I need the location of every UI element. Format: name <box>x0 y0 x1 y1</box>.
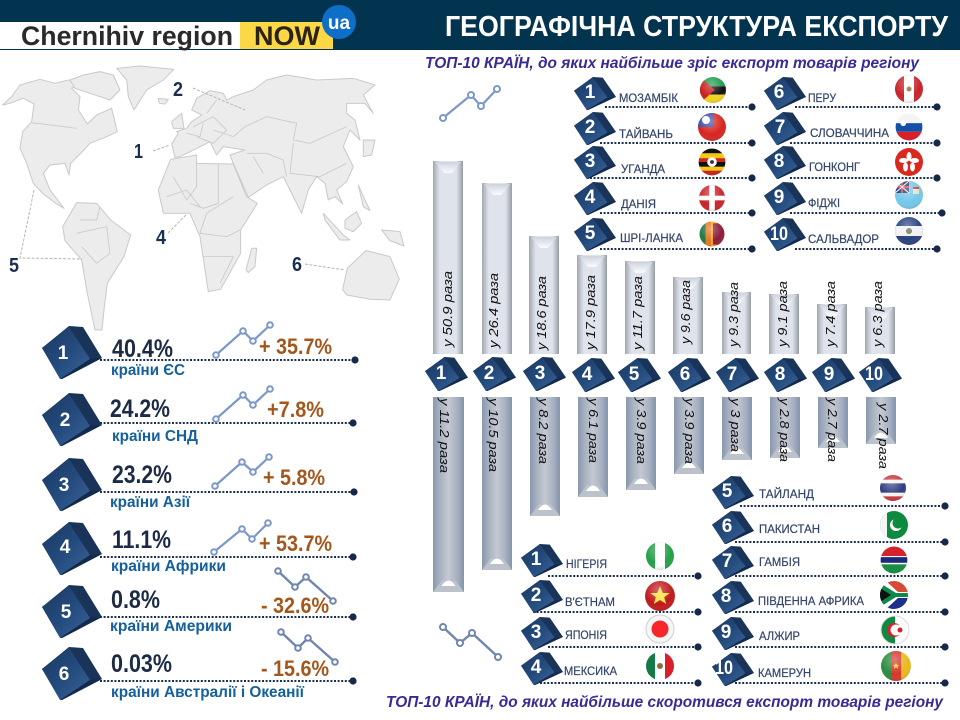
bar 10 top <box>865 281 895 354</box>
bar 10 bottom <box>866 397 896 469</box>
region row 2 <box>42 386 357 446</box>
row Mozambique: МОЗАМБІК <box>619 93 678 105</box>
row El Salvador: САЛЬВАДОР <box>808 234 879 246</box>
region row 6: - 15.6% <box>261 656 329 681</box>
row Nigeria <box>521 542 702 580</box>
icon: growth trend <box>440 86 500 121</box>
subtitle: top decline: ТОП-10 КРАЇН, до яких найбільше скоротився експорт товарів регіону <box>386 693 944 711</box>
row South Africa: 8 <box>721 586 731 607</box>
bar 10 top: у 6.3 раза <box>870 281 885 348</box>
bar number cubes: 7 <box>727 364 737 385</box>
region row 5: 0.8% <box>111 586 160 614</box>
region row 1 <box>42 322 359 379</box>
row El Salvador <box>764 217 941 253</box>
region row 4: 11.1% <box>112 526 171 554</box>
bar 4 bottom <box>578 397 608 497</box>
row Algeria: 9 <box>721 622 731 643</box>
row Hong Kong: ГОНКОНГ <box>809 162 861 174</box>
bar 10 bottom: у 2.7 раза <box>876 402 891 469</box>
row Algeria: АЛЖИР <box>759 631 800 643</box>
bar number cubes: 3 <box>535 363 545 384</box>
row Mozambique: 1 <box>585 82 596 103</box>
bar 7 top <box>722 282 751 354</box>
bar number cubes: 8 <box>775 364 785 385</box>
row Taiwan: ТАЙВАНЬ <box>619 128 673 141</box>
region row 6 <box>42 629 357 701</box>
bar number cubes: 10 <box>865 364 883 385</box>
bar 5 top <box>625 261 655 354</box>
row Cameroon <box>712 651 949 687</box>
region row 4: + 53.7% <box>259 531 332 556</box>
row Peru: ПЕРУ <box>808 93 837 105</box>
icon: flag Pakistan <box>880 511 908 539</box>
bar number cubes: 5 <box>629 364 640 385</box>
row Peru: 6 <box>774 82 784 103</box>
bar 2 bottom <box>482 397 512 570</box>
icon: flag Thailand <box>880 475 906 501</box>
bar 7 top: у 9.3 раза <box>726 282 741 348</box>
row South Africa <box>712 581 949 616</box>
logo badge: ua <box>322 5 356 39</box>
region row 3: 23.2% <box>112 461 172 489</box>
bar 8 top <box>769 281 799 354</box>
icon: flag Vietnam <box>645 581 675 611</box>
icon: flag El Salvador <box>895 217 923 245</box>
row Uganda: 3 <box>585 151 595 172</box>
row Sri Lanka: ШРІ-ЛАНКА <box>620 233 683 245</box>
region row 1: + 35.7% <box>259 334 332 359</box>
row Vietnam <box>521 580 702 616</box>
icon: flag Algeria <box>881 616 909 644</box>
bar number cubes: 6 <box>680 364 690 385</box>
bar number cubes: 4 <box>582 364 593 385</box>
bar 6 bottom <box>674 397 704 474</box>
bar 8 top: у 9.1 раза <box>775 281 790 348</box>
icon: flag Hong Kong <box>895 148 923 176</box>
row Gambia: ГАМБІЯ <box>759 557 800 569</box>
bar 8 bottom: у 2.8 раза <box>777 397 792 462</box>
logo badge: ua: ua <box>328 13 351 34</box>
map label 5: 5 <box>9 255 19 277</box>
bar 6 top <box>673 277 703 354</box>
icon: flag Peru <box>895 75 923 103</box>
icon: flag Denmark <box>699 185 725 211</box>
region row 5: 5 <box>61 602 72 623</box>
row Pakistan: 6 <box>722 516 732 537</box>
bar 2 top: у 26.4 раза <box>486 273 501 349</box>
region row 3: 3 <box>59 475 69 496</box>
row Hong Kong: 8 <box>774 151 784 172</box>
bar 3 top: у 18.6 раза <box>534 276 549 351</box>
row Pakistan <box>712 511 949 546</box>
row Denmark: 4 <box>585 187 596 208</box>
row Peru <box>764 75 941 111</box>
bar 6 bottom: у 3.9 раза <box>682 397 697 464</box>
row Uganda <box>574 146 756 182</box>
bar 1 bottom: у 11.2 раза <box>437 397 452 473</box>
bar 1 top: у 50.9 раза <box>440 271 455 348</box>
icon: flag Slovenia <box>896 114 922 140</box>
bar 1 bottom <box>433 397 464 592</box>
row Vietnam: В'ЄТНАМ <box>565 597 615 609</box>
bar 5 bottom: у 3.9 раза <box>634 397 649 464</box>
icon: flag Fiji <box>895 181 923 209</box>
icon: flag Taiwan <box>698 113 726 141</box>
row Pakistan: ПАКИСТАН <box>759 524 820 536</box>
icon: flag Nigeria <box>646 542 674 570</box>
row Algeria <box>712 616 949 651</box>
row El Salvador: 10 <box>770 224 788 245</box>
region row 6: 6 <box>59 664 69 685</box>
chart: decline bars <box>433 397 896 592</box>
bar 7 bottom <box>722 397 752 460</box>
row Vietnam: 2 <box>531 585 541 606</box>
bar 7 bottom: у 3 раза <box>728 397 743 452</box>
icon: flag South Africa <box>880 581 908 609</box>
row Japan: 3 <box>531 622 541 643</box>
header bar <box>0 0 960 51</box>
bar 9 bottom <box>818 397 848 462</box>
bar number cubes: 2 <box>484 363 494 384</box>
bar 4 top: у 17.9 раза <box>583 275 598 351</box>
logo text: NOW: NOW <box>254 21 321 51</box>
row Hong Kong <box>764 146 941 182</box>
region row 1: 1 <box>58 343 69 364</box>
bar 3 bottom: у 8.2 раза <box>536 397 551 464</box>
world map <box>3 66 404 330</box>
chart: growth bars <box>433 161 895 354</box>
icon: flag Cameroon <box>881 651 911 681</box>
bar 2 top <box>482 183 512 354</box>
region row 6: країни Австралії і Океанії <box>111 684 304 701</box>
region row 2: 2 <box>60 410 70 431</box>
row Cameroon: КАМЕРУН <box>758 668 811 680</box>
bar 6 top: у 9.6 раза <box>678 280 693 345</box>
panel: growth countries <box>574 75 946 253</box>
row Slovakia: СЛОВАЧЧИНА <box>810 128 889 140</box>
row Thailand: ТАЙЛАНД <box>759 488 814 501</box>
region row 4: 4 <box>60 537 71 558</box>
icon: flag Japan <box>646 615 674 643</box>
bar 5 bottom <box>626 397 656 490</box>
row Nigeria: 1 <box>531 549 542 570</box>
region row 5 <box>42 568 357 638</box>
row Mexico: 4 <box>531 657 542 678</box>
region row 2: країни СНД <box>112 428 199 445</box>
subtitle: top growth: ТОП-10 КРАЇН, до яких найбільше зріс експорт товарів регіону <box>425 54 920 72</box>
row Denmark <box>574 182 756 217</box>
row Nigeria: НІГЕРІЯ <box>566 559 607 571</box>
region row 2: +7.8% <box>267 397 324 422</box>
bar 1 top <box>433 161 463 354</box>
row Thailand: 5 <box>722 481 733 502</box>
icon: flag Mexico <box>646 652 674 680</box>
leader lines <box>20 88 345 270</box>
region row 4: країни Африки <box>111 558 226 575</box>
row Taiwan <box>574 112 756 147</box>
map label 4: 4 <box>156 227 167 249</box>
row Sri Lanka: 5 <box>585 223 596 244</box>
row Denmark: ДАНІЯ <box>621 199 656 211</box>
row Cameroon: 10 <box>715 658 733 679</box>
row Sri Lanka <box>574 218 756 253</box>
row Gambia: 7 <box>722 551 732 572</box>
bar 3 bottom <box>530 397 560 516</box>
row Slovakia: 7 <box>775 117 785 138</box>
region row 5: країни Америки <box>110 618 232 635</box>
panel: decline countries <box>521 475 949 687</box>
row Thailand <box>712 475 949 510</box>
row Japan: ЯПОНІЯ <box>565 630 607 642</box>
region row 4 <box>42 520 357 575</box>
icon: flag Gambia <box>881 547 907 574</box>
region row 2: 24.2% <box>110 395 170 423</box>
bar 9 bottom: у 2.7 раза <box>825 397 840 462</box>
bar number cubes: 9 <box>824 364 834 385</box>
region row 6: 0.03% <box>111 650 172 678</box>
map label 6: 6 <box>292 254 302 276</box>
row Mozambique <box>574 77 756 111</box>
region row 3 <box>42 454 358 511</box>
logo text: Chernihiv region: Chernihiv region <box>21 21 233 51</box>
row Slovakia <box>764 112 941 147</box>
row Fiji: ФІДЖІ <box>808 198 840 210</box>
bar number cubes: 1 <box>436 363 447 384</box>
icon: flag Sri Lanka <box>700 222 724 246</box>
region row 1: країни ЄС <box>111 362 185 379</box>
icon: flag Uganda <box>699 149 725 175</box>
row South Africa: ПІВДЕННА АФРИКА <box>758 596 864 608</box>
bar 4 top <box>577 255 607 354</box>
row Gambia <box>712 546 949 580</box>
region row 3: країни Азії <box>110 494 190 511</box>
bar 4 bottom: у 6.1 раза <box>586 397 601 463</box>
icon: decline trend <box>440 624 501 660</box>
bar 2 bottom: у 10.5 раза <box>486 397 501 472</box>
row Japan <box>521 615 702 651</box>
bar 5 top: у 11.7 раза <box>630 276 645 351</box>
row Mexico: МЕКСИКА <box>564 666 617 678</box>
row Mexico <box>521 652 702 687</box>
region row 5: - 32.6% <box>261 593 329 618</box>
bar number cubes <box>425 357 902 392</box>
bar 8 bottom <box>770 397 800 462</box>
row Taiwan: 2 <box>585 117 595 138</box>
bar 3 top <box>529 236 559 354</box>
bar 9 top <box>817 281 847 354</box>
bar 9 top: у 7.4 раза <box>823 281 838 348</box>
map label 2: 2 <box>173 79 183 101</box>
map label 1: 1 <box>134 141 143 163</box>
region row 3: + 5.8% <box>263 465 325 490</box>
row Uganda: УГАНДА <box>621 164 665 176</box>
row Fiji: 9 <box>774 187 784 208</box>
panel: regions list <box>42 322 359 701</box>
region row 1: 40.4% <box>112 335 173 363</box>
icon: flag Mozambique <box>700 77 726 103</box>
row Fiji <box>764 181 946 217</box>
